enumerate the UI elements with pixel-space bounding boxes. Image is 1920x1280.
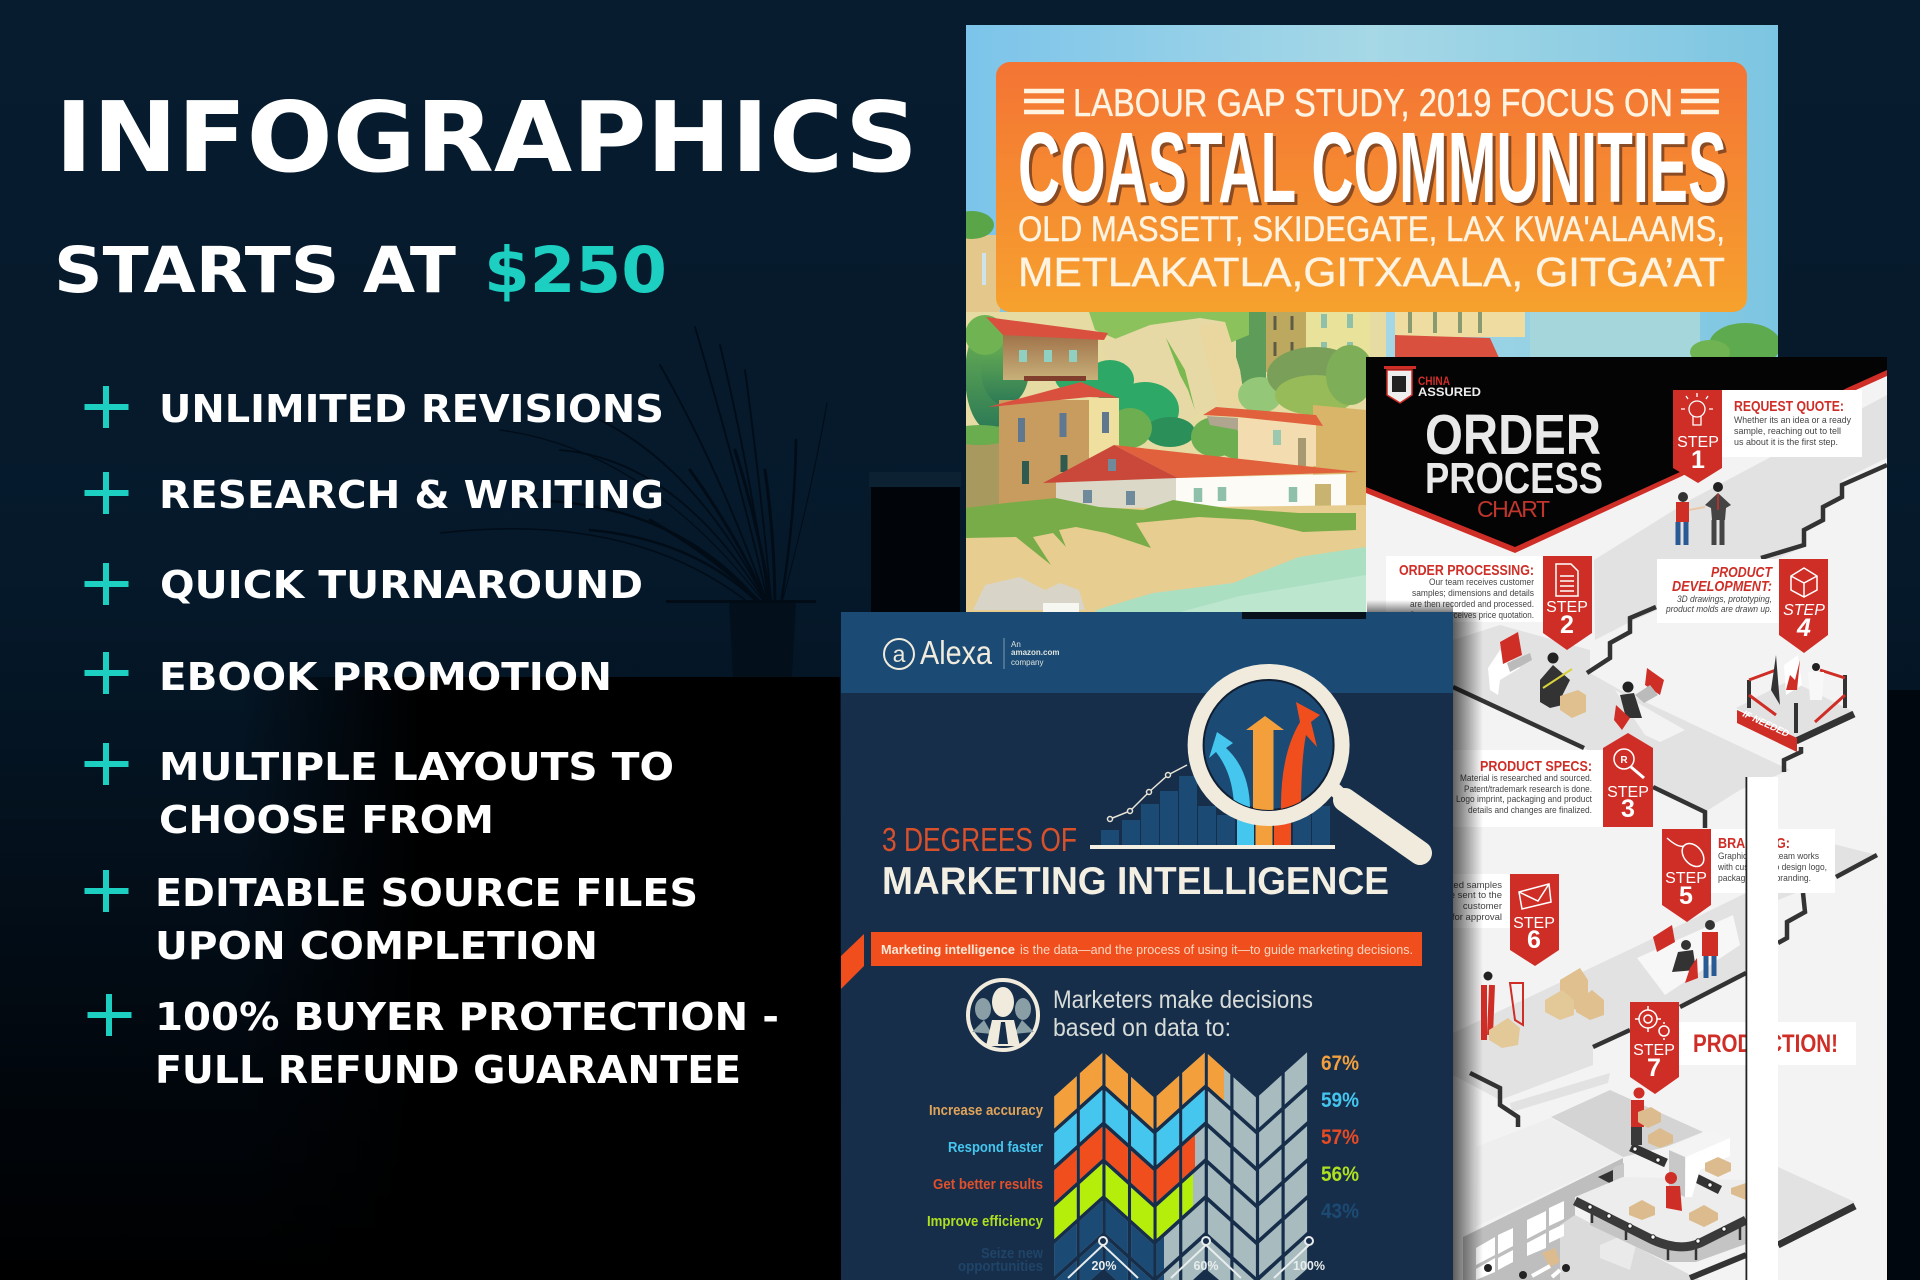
title: INFOGRAPHICS bbox=[55, 81, 918, 194]
bushes bbox=[965, 315, 1374, 460]
bar and trend chart bbox=[1090, 765, 1335, 849]
item: buyer protection: FULL REFUND GUARANTEE bbox=[155, 1048, 741, 1093]
white fold strip bbox=[1746, 777, 1778, 1280]
strip and shadow around alexa panel bbox=[1367, 600, 1483, 1280]
step 3 card bbox=[1453, 733, 1653, 827]
people: step 1 bbox=[1676, 482, 1731, 545]
step 2 card: Customer receives price quotation. bbox=[1409, 610, 1534, 621]
china assured logo: ASSURED bbox=[1418, 385, 1481, 399]
icon: envelope bbox=[1519, 884, 1551, 909]
step 4 card: STEP bbox=[1783, 602, 1825, 619]
percentage scale: 20% bbox=[1091, 1259, 1117, 1273]
chart intro text: based on data to: bbox=[1053, 1014, 1231, 1042]
item: ebook promotion: EBOOK PROMOTION bbox=[159, 655, 612, 700]
item: multiple layouts bbox=[84, 743, 674, 843]
chart intro text: Marketers make decisions bbox=[1053, 986, 1313, 1014]
step 2 card: ORDER PROCESSING: bbox=[1399, 562, 1534, 579]
cliff, ledge and water bbox=[966, 505, 1366, 612]
subtitle: price bbox=[54, 234, 667, 307]
step 6 card: for approval bbox=[1452, 912, 1502, 923]
step 4 card: 4 bbox=[1796, 614, 1811, 642]
worker 2 bbox=[1665, 1172, 1677, 1184]
step 1 card: Whether its an idea or a ready bbox=[1734, 415, 1851, 426]
alexa heading bbox=[882, 821, 1389, 903]
sky bbox=[966, 25, 1778, 365]
item: multiple layouts: CHOOSE FROM bbox=[159, 798, 494, 843]
item: buyer protection: 100% BUYER PROTECTION - bbox=[155, 995, 779, 1040]
step 3 card: R bbox=[1620, 755, 1628, 766]
upper belt bbox=[1631, 1147, 1720, 1190]
icon: light bulb bbox=[1681, 393, 1713, 425]
step 1 card: us about it is the first step. bbox=[1734, 437, 1838, 448]
alexa logo: Alexa bbox=[920, 634, 993, 671]
percentages: 43% bbox=[1321, 1200, 1359, 1223]
community names: OLD MASSETT, SKIDEGATE, LAX KWA'ALAAMS, bbox=[1018, 210, 1725, 249]
arrow: red bbox=[1281, 702, 1320, 812]
row labels: Get better results bbox=[933, 1177, 1043, 1193]
alexa heading: 3 DEGREES OF bbox=[882, 821, 1077, 858]
hamburger marks bbox=[1024, 91, 1719, 112]
row labels: Improve efficiency bbox=[927, 1214, 1043, 1230]
percentages: 59% bbox=[1321, 1089, 1359, 1112]
step 4 card: product molds are drawn up. bbox=[1665, 604, 1772, 615]
step 5 card: packaging and branding. bbox=[1718, 873, 1811, 884]
order process heading: PROCESS bbox=[1425, 454, 1603, 503]
factory floor and upper platform bbox=[1463, 1090, 1703, 1280]
arrow: blue bbox=[1209, 732, 1250, 810]
icon: marketers circle bbox=[968, 980, 1038, 1050]
icon: magnifying glass with arrows bbox=[1188, 664, 1420, 853]
alexa heading: MARKETING INTELLIGENCE bbox=[882, 860, 1389, 903]
feature list bbox=[84, 386, 779, 1093]
step 1 card bbox=[1673, 390, 1862, 483]
definition banner bbox=[841, 932, 1422, 989]
panel: order process chart bbox=[1366, 357, 1887, 1280]
dark stair lines bbox=[1453, 465, 1887, 1278]
step 5 card: 5 bbox=[1679, 882, 1693, 910]
step 2 card bbox=[1386, 556, 1592, 650]
step 3 card: STEP bbox=[1607, 784, 1649, 801]
step 4 card: 3D drawings, prototyping, bbox=[1677, 594, 1772, 605]
step 3 card: Material is researched and sourced. bbox=[1460, 773, 1592, 784]
panel: coastal communities poster bbox=[948, 25, 1781, 613]
step 3 card: 3 bbox=[1621, 795, 1635, 823]
step 6 card: Completed samples bbox=[1418, 880, 1502, 891]
belt legs bbox=[1592, 1213, 1740, 1260]
step 3 card: Patent/trademark research is done. bbox=[1464, 784, 1592, 795]
scene: step 2 and 3 desks bbox=[1488, 632, 1685, 742]
definition banner: is the data—and the process of using it—to guide marketing decisions. bbox=[1020, 942, 1413, 957]
chart intro text bbox=[1053, 986, 1313, 1042]
step 2 card: STEP bbox=[1546, 599, 1588, 616]
step 6 card bbox=[1418, 874, 1559, 966]
main house bbox=[1056, 478, 1176, 510]
arrow: orange bbox=[1246, 716, 1284, 812]
subtitle: price: $250 bbox=[484, 234, 667, 307]
row labels: Seize new bbox=[981, 1246, 1044, 1262]
bottom workers bbox=[1484, 1264, 1492, 1272]
step 1 card: sample, reaching out to tell bbox=[1734, 426, 1841, 437]
step 1 card: STEP bbox=[1677, 434, 1719, 451]
percentages: 56% bbox=[1321, 1163, 1359, 1186]
house top left bbox=[1003, 335, 1098, 380]
community names second line: METLAKATLA,GITXAALA, GITGA’AT bbox=[1018, 249, 1725, 295]
floor under belt bbox=[1590, 1214, 1746, 1262]
item: quick turnaround: QUICK TURNAROUND bbox=[160, 563, 643, 608]
subtitle: price: STARTS AT bbox=[54, 234, 456, 307]
row labels: Increase accuracy bbox=[929, 1103, 1043, 1119]
step 6 card: 6 bbox=[1527, 926, 1541, 954]
icon: cube bbox=[1791, 568, 1817, 597]
definition banner: Marketing intelligence bbox=[881, 942, 1015, 957]
left hill bbox=[966, 443, 999, 508]
step 5 card bbox=[1662, 829, 1835, 922]
item: multiple layouts: MULTIPLE LAYOUTS TO bbox=[159, 745, 674, 790]
step 6 card: are sent to the bbox=[1441, 890, 1502, 901]
scene: conveyor and workers bbox=[1484, 1088, 1746, 1279]
step 7 card: STEP bbox=[1633, 1042, 1675, 1059]
house left bbox=[999, 400, 1089, 505]
item: buyer protection bbox=[88, 994, 779, 1093]
pit and column bbox=[1613, 1163, 1624, 1188]
platform top bbox=[1575, 1177, 1746, 1247]
scene: if needed platform bbox=[1737, 655, 1845, 752]
poster heading: LABOUR GAP STUDY, 2019 FOCUS ON bbox=[1073, 82, 1673, 125]
step 6 card: STEP bbox=[1513, 915, 1555, 932]
item: unlimited revisions: UNLIMITED REVISIONS bbox=[159, 387, 664, 432]
village illustration bbox=[948, 211, 1781, 613]
step 4 card: PRODUCT bbox=[1711, 564, 1774, 581]
percentages: 67% bbox=[1321, 1052, 1359, 1075]
alexa logo: a bbox=[893, 641, 906, 667]
plant silhouette and phone in background bbox=[441, 327, 961, 677]
cliff face bbox=[1116, 318, 1241, 376]
house back right bbox=[1238, 418, 1316, 466]
alexa logo: amazon.com bbox=[1011, 648, 1059, 657]
boxes bbox=[1629, 1200, 1655, 1220]
distant tower and yellow building bbox=[1266, 312, 1306, 372]
step 5 card: Graphic design team works bbox=[1718, 851, 1819, 862]
scene: if needed platform: IF NEEDED bbox=[1741, 709, 1791, 740]
icon: gears bbox=[1635, 1006, 1669, 1040]
row labels: Respond faster bbox=[948, 1140, 1043, 1156]
percentages: 57% bbox=[1321, 1126, 1359, 1149]
icon: document bbox=[1556, 564, 1578, 596]
gate bbox=[1669, 1150, 1685, 1197]
order process heading bbox=[1427, 414, 1602, 517]
step 4 card bbox=[1657, 559, 1828, 653]
step 7 card bbox=[1630, 1002, 1856, 1094]
item: editable source files bbox=[84, 870, 698, 969]
step 1 card: 1 bbox=[1691, 446, 1705, 474]
step 2 card: samples; dimensions and details bbox=[1412, 588, 1534, 599]
step 4 card: DEVELOPMENT: bbox=[1672, 578, 1772, 595]
step 2 card: Our team receives customer bbox=[1429, 577, 1534, 588]
step 3 card: Logo imprint, packaging and product bbox=[1456, 794, 1592, 805]
item: editable source files: UPON COMPLETION bbox=[155, 924, 598, 969]
black header shape bbox=[1366, 357, 1887, 553]
worker 1 bbox=[1634, 1088, 1644, 1098]
row labels bbox=[927, 1103, 1044, 1275]
percentage scale: 100% bbox=[1293, 1259, 1325, 1273]
percentage scale: 60% bbox=[1193, 1259, 1219, 1273]
step 6 card: customer bbox=[1463, 901, 1502, 912]
china assured logo: CHINA bbox=[1418, 374, 1450, 388]
alexa logo: company bbox=[1011, 658, 1043, 667]
percentages bbox=[1321, 1052, 1359, 1223]
step 2 card: are then recorded and processed. bbox=[1410, 599, 1534, 610]
item: research and writing: RESEARCH & WRITING bbox=[159, 473, 664, 518]
chevron percentage chart bbox=[927, 1052, 1359, 1280]
alexa logo: An bbox=[1011, 640, 1021, 649]
step 5 card: with customer to design logo, bbox=[1717, 862, 1827, 873]
lower belt bbox=[1575, 1201, 1746, 1247]
icon: mouse bbox=[1666, 838, 1705, 868]
right-side roof and bushes behind order chart bbox=[1395, 312, 1525, 337]
poster main title bbox=[1020, 132, 1728, 206]
china assured logo bbox=[1384, 366, 1481, 403]
step 5 card: BRANDING: bbox=[1718, 835, 1790, 852]
item: editable source files: EDITABLE SOURCE FILES bbox=[155, 871, 698, 916]
percentage scale bbox=[1068, 1237, 1325, 1278]
stair floors bbox=[1453, 395, 1887, 1240]
step 2 card: 2 bbox=[1560, 611, 1574, 639]
panel: alexa marketing intelligence bbox=[841, 612, 1453, 1280]
scene: step 5 desk bbox=[1637, 915, 1740, 995]
scene: step 6 boxes and trolley bbox=[1484, 968, 1604, 1048]
icon: magnifier with R bbox=[1614, 749, 1644, 778]
step 7 card: PRODUCTION! bbox=[1693, 1030, 1838, 1058]
alexa logo bbox=[884, 634, 1059, 671]
step 5 card: STEP bbox=[1665, 870, 1707, 887]
step 3 card: details and changes are finalized. bbox=[1468, 805, 1592, 816]
step 7 card: 7 bbox=[1647, 1054, 1661, 1082]
order process heading: ORDER bbox=[1425, 403, 1601, 467]
row labels: opportunities bbox=[958, 1259, 1043, 1275]
step 1 card: REQUEST QUOTE: bbox=[1734, 398, 1844, 415]
orange heading box bbox=[996, 62, 1747, 312]
windows bbox=[1476, 1201, 1564, 1280]
order process heading: CHART bbox=[1477, 496, 1550, 522]
step 3 card: PRODUCT SPECS: bbox=[1480, 758, 1592, 775]
